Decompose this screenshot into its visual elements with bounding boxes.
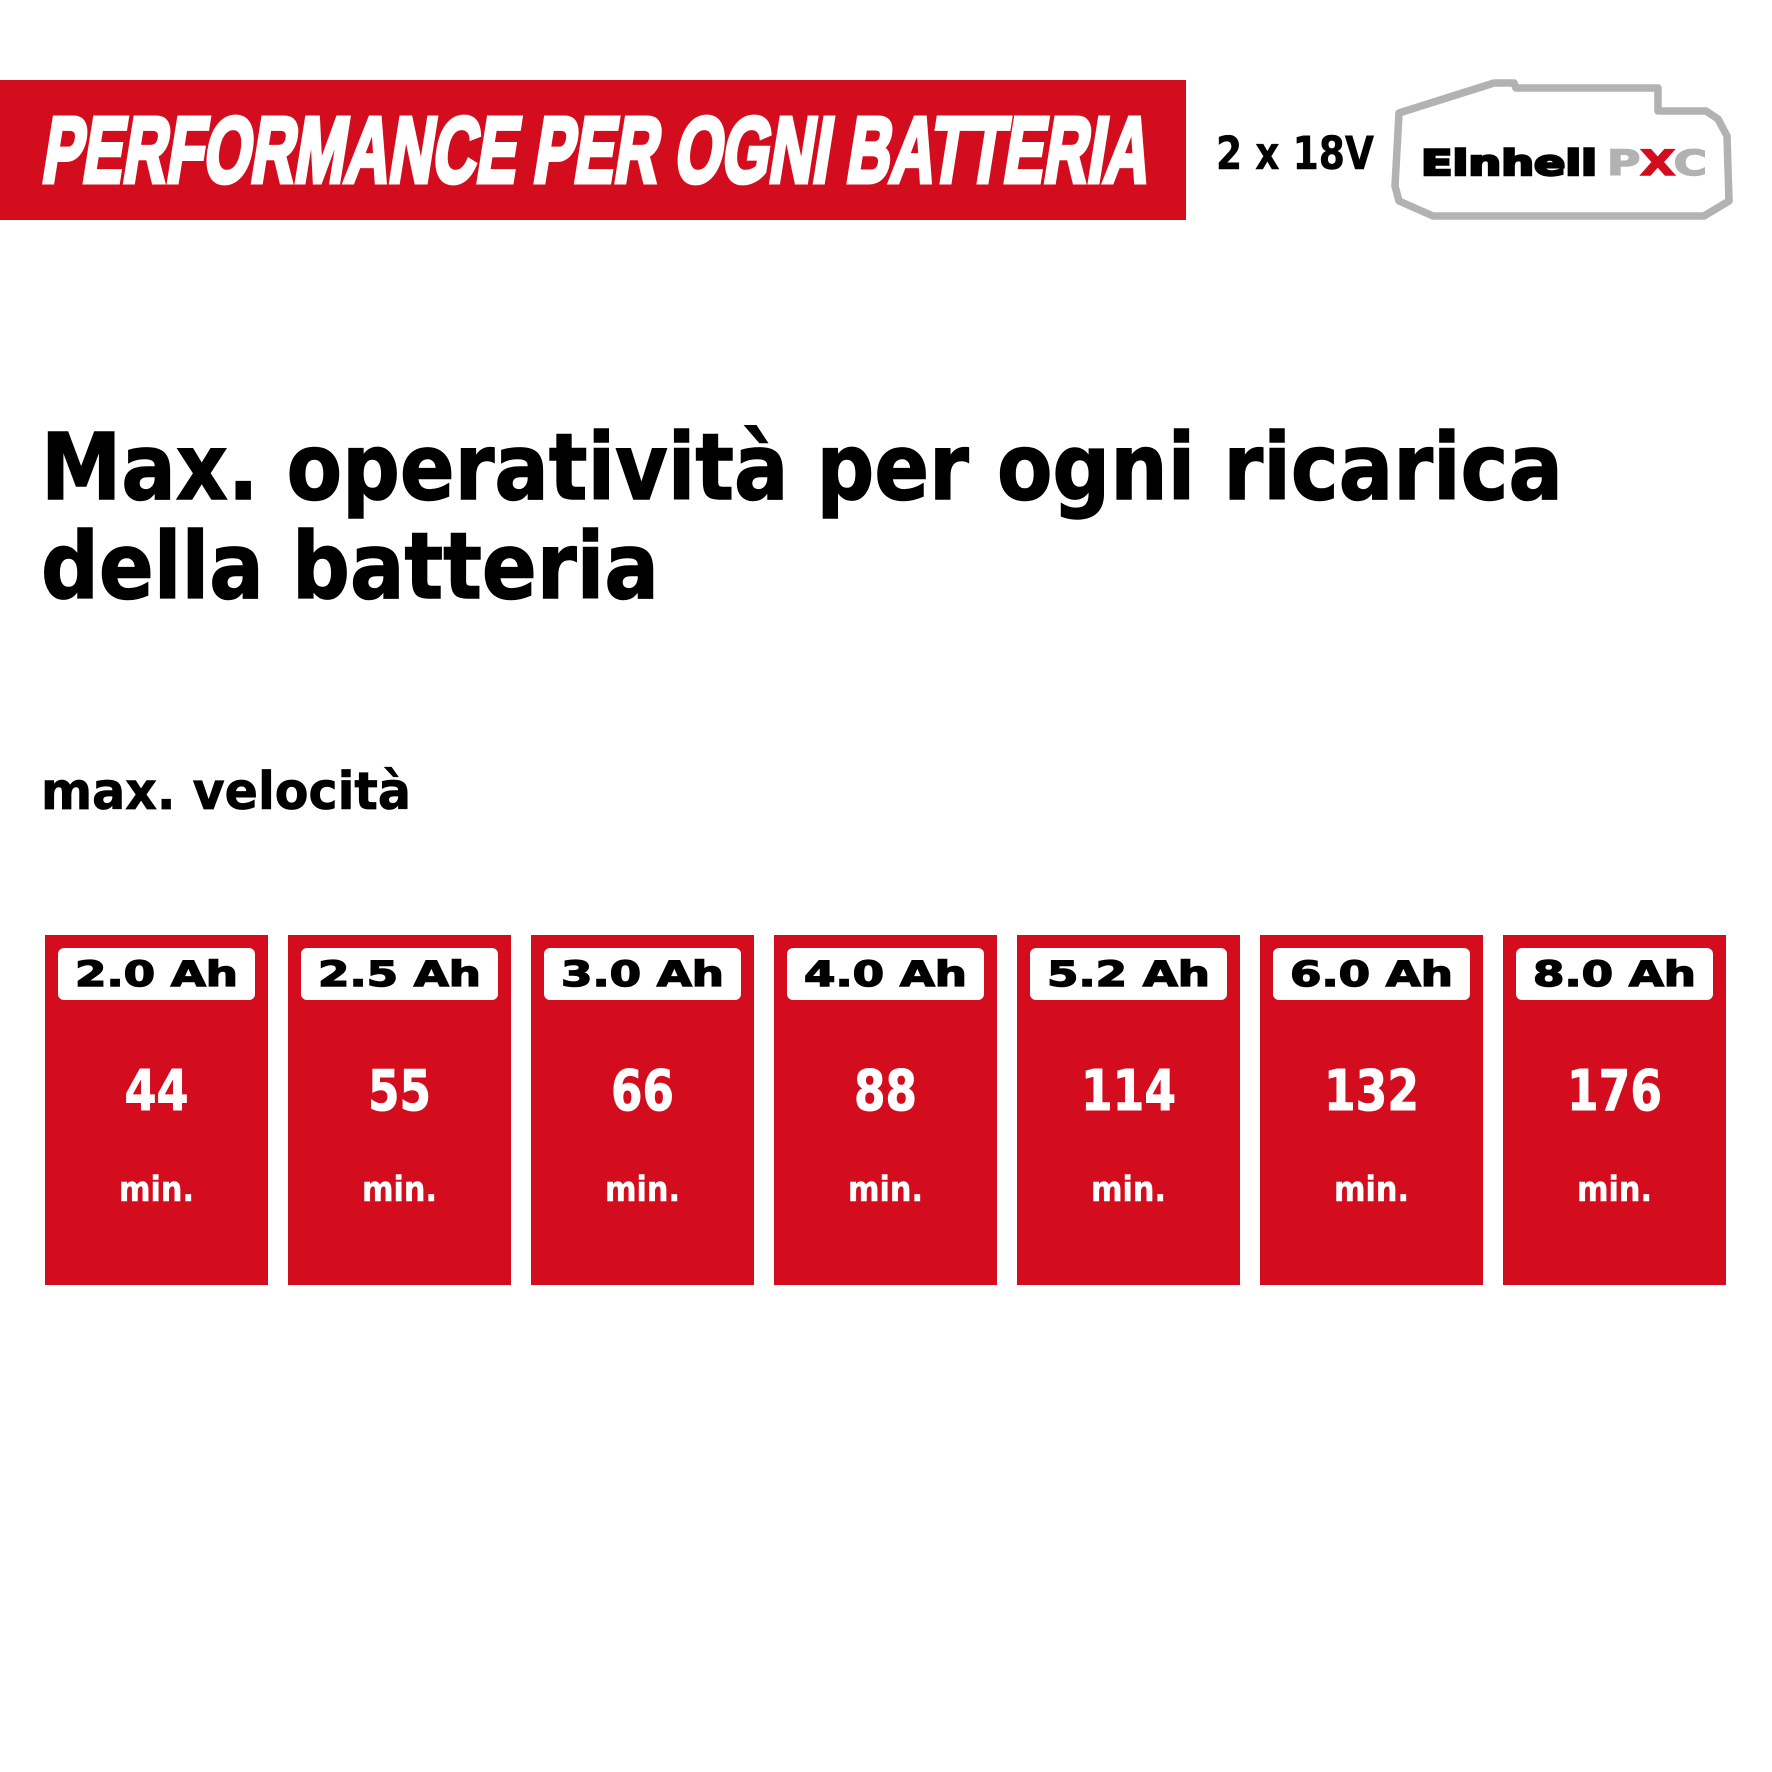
card: 8.0 Ah: 8.0 Ah bbox=[1533, 955, 1696, 995]
card: 2.5 Ah bbox=[288, 935, 511, 1285]
card: 6.0 Ah: 132 bbox=[1324, 1059, 1419, 1124]
main heading: Max. operatività per ogni ricarica bbox=[41, 414, 1563, 521]
card: 8.0 Ah: 176 bbox=[1567, 1059, 1662, 1124]
card: 3.0 Ah: min. bbox=[605, 1170, 680, 1210]
subheading: max. velocità bbox=[41, 762, 411, 822]
main heading: della batteria bbox=[41, 513, 659, 620]
card: 3.0 Ah: 66 bbox=[611, 1059, 674, 1124]
card: 2.5 Ah: 2.5 Ah bbox=[318, 955, 481, 995]
card: 6.0 Ah bbox=[1260, 935, 1483, 1285]
card: 2.5 Ah: min. bbox=[362, 1170, 437, 1210]
card: 8.0 Ah bbox=[1503, 935, 1726, 1285]
logo wordmark PXC: PXC bbox=[1607, 144, 1707, 184]
card: 5.2 Ah: 5.2 Ah bbox=[1047, 955, 1210, 995]
card: 8.0 Ah: min. bbox=[1577, 1170, 1652, 1210]
card: 4.0 Ah: min. bbox=[848, 1170, 923, 1210]
voltage label: 2 x 18V bbox=[1216, 127, 1374, 180]
card: 3.0 Ah bbox=[531, 935, 754, 1285]
card: 3.0 Ah: 3.0 Ah bbox=[561, 955, 724, 995]
card: 6.0 Ah: 6.0 Ah bbox=[1290, 955, 1453, 995]
card: 2.0 Ah: 44 bbox=[124, 1059, 188, 1124]
card: 5.2 Ah: 114 bbox=[1081, 1059, 1176, 1124]
card: 4.0 Ah: 4.0 Ah bbox=[804, 955, 967, 995]
card: 4.0 Ah: 88 bbox=[854, 1059, 917, 1124]
card: 4.0 Ah bbox=[774, 935, 997, 1285]
banner title: PERFORMANCE PER OGNI BATTERIA bbox=[37, 98, 1159, 202]
banner: performance per ogni batteria bbox=[0, 80, 1186, 220]
card: 5.2 Ah bbox=[1017, 935, 1240, 1285]
card: 2.0 Ah: 2.0 Ah bbox=[75, 955, 238, 995]
card: 2.0 Ah: min. bbox=[119, 1170, 194, 1210]
card: 5.2 Ah: min. bbox=[1091, 1170, 1166, 1210]
icon: battery outline with Einhell PXC logo bbox=[1395, 83, 1729, 216]
logo wordmark Einhell: Einhell bbox=[1421, 144, 1597, 184]
main heading bbox=[41, 414, 1563, 620]
card: 2.0 Ah bbox=[45, 935, 268, 1285]
card: 2.5 Ah: 55 bbox=[368, 1059, 431, 1124]
card: 6.0 Ah: min. bbox=[1334, 1170, 1409, 1210]
